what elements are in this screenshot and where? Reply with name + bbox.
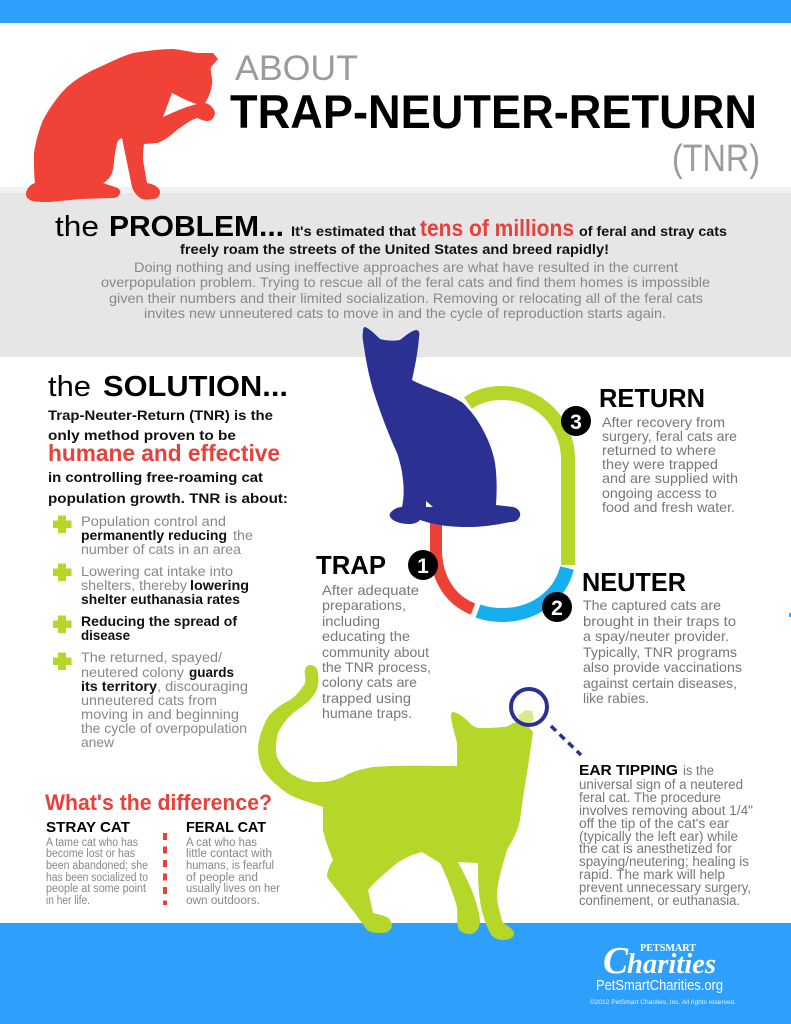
bullet 2: lowering bbox=[190, 577, 249, 593]
feral cat text: own outdoors. bbox=[186, 895, 260, 907]
feral cat text: usually lives on her bbox=[186, 883, 280, 895]
ear tipping text: (typically the left ear) while bbox=[579, 829, 738, 844]
ring segment: neuter bbox=[478, 568, 567, 615]
neuter text: The captured cats are bbox=[583, 597, 721, 613]
trap text: preparations, bbox=[322, 597, 406, 613]
solution intro text: population growth. TNR is about: bbox=[48, 490, 288, 506]
ear tipping text: confinement, or euthanasia. bbox=[579, 893, 740, 908]
trap text: including bbox=[322, 613, 380, 629]
clipped ear tip bbox=[518, 710, 534, 723]
neuter text: also provide vaccinations bbox=[583, 659, 742, 675]
ear tipping text: prevent unnecessary surgery, bbox=[579, 880, 751, 895]
ear tipping text: involves removing about 1/4" bbox=[579, 803, 753, 818]
trap text bbox=[322, 582, 431, 721]
problem lead sentence: of feral and stray cats bbox=[579, 223, 727, 239]
bullet 2: shelter euthanasia rates bbox=[81, 591, 240, 607]
feral cat text: of people and bbox=[186, 872, 258, 884]
heading: return: RETURN bbox=[599, 383, 705, 413]
trap text: community about bbox=[322, 644, 429, 660]
return text: ongoing access to bbox=[602, 485, 717, 501]
stray cat text bbox=[46, 837, 148, 907]
solution intro text: humane and effective bbox=[48, 440, 280, 466]
heading: neuter: NEUTER bbox=[582, 567, 686, 597]
stray cat text: A tame cat who has bbox=[46, 837, 138, 849]
ear tipping lead: EAR TIPPING bbox=[579, 762, 678, 779]
return text: surgery, feral cats are bbox=[602, 428, 737, 444]
title: about: ABOUT bbox=[235, 49, 358, 88]
solution intro text: Trap-Neuter-Return (TNR) is the bbox=[48, 407, 273, 423]
trap text: educating the bbox=[322, 628, 410, 644]
trap text: After adequate bbox=[322, 582, 419, 598]
bullet list bbox=[53, 513, 253, 750]
ear tipping lead: is the bbox=[683, 763, 714, 778]
neuter text bbox=[583, 597, 742, 706]
bullet 1: permanently reducing bbox=[81, 527, 227, 543]
heading: the solution: SOLUTION... bbox=[103, 371, 288, 403]
copyright: ©2012 PetSmart Charities, Inc. All rights reserved. bbox=[590, 998, 736, 1006]
badge 3: 3 bbox=[570, 411, 582, 434]
website: PetSmartCharities.org bbox=[596, 978, 723, 994]
return text: food and fresh water. bbox=[602, 499, 735, 515]
ear tipping text bbox=[579, 777, 753, 908]
icon: red grooming cat bbox=[26, 49, 218, 202]
bullet 1: the bbox=[233, 527, 253, 543]
problem body text: given their numbers and their limited socialization. Removing or relocating all of the feral cats bbox=[109, 290, 703, 306]
small edge mark bbox=[789, 613, 791, 617]
logo small wordmark: PETSMART bbox=[640, 943, 696, 954]
return text: and are supplied with bbox=[602, 470, 738, 486]
stray cat column bbox=[46, 819, 148, 907]
ear tipping marker bbox=[511, 689, 581, 755]
heading: the problem: PROBLEM... bbox=[109, 211, 284, 243]
bullet 4: The returned, spayed/ bbox=[81, 649, 222, 665]
panel: the solution bbox=[48, 371, 288, 750]
feral cat text: A cat who has bbox=[186, 837, 257, 849]
problem lead sentence bbox=[180, 215, 727, 257]
ear tipping text: universal sign of a neutered bbox=[579, 777, 743, 792]
top blue bar bbox=[0, 0, 791, 23]
bullet 3: disease bbox=[81, 627, 130, 643]
bullet 4: unneutered cats from bbox=[81, 692, 217, 708]
bullet 4: , discouraging bbox=[157, 678, 248, 694]
logo: petsmart charities bbox=[590, 940, 736, 1006]
footer band bbox=[0, 923, 791, 1024]
ear tipping text: rapid. The mark will help bbox=[579, 867, 725, 882]
notch in blue cat bbox=[426, 501, 433, 507]
ear tipping text: spaying/neutering; healing is bbox=[579, 854, 749, 869]
logo script initial: C bbox=[603, 940, 629, 982]
bullet 2: Lowering cat intake into bbox=[81, 563, 233, 579]
neuter text: like rabies. bbox=[583, 690, 649, 706]
trap text: humane traps. bbox=[322, 705, 412, 721]
bullet 2 bbox=[53, 563, 249, 607]
solution intro text bbox=[48, 407, 288, 506]
neuter text: brought in their traps to bbox=[583, 613, 736, 629]
icon: green standing cat bbox=[258, 665, 533, 940]
panel: trap bbox=[316, 550, 431, 721]
feral cat column bbox=[186, 819, 280, 907]
feral cat text: little contact with bbox=[186, 848, 272, 860]
heading: trap: TRAP bbox=[316, 550, 386, 580]
stray cat text: has been socialized to bbox=[46, 872, 148, 884]
return text: returned to where bbox=[602, 442, 716, 458]
trap text: the TNR process, bbox=[322, 659, 431, 675]
red dashed divider bbox=[163, 833, 167, 905]
panel: what's the difference bbox=[45, 790, 280, 907]
feral cat text: humans, is fearful bbox=[186, 860, 274, 872]
badge 2 bbox=[542, 592, 572, 622]
badge 3 bbox=[561, 406, 591, 436]
ear tipping text: feral cat. The procedure bbox=[579, 790, 721, 805]
return text: they were trapped bbox=[602, 456, 718, 472]
logo script wordmark: harities bbox=[627, 948, 716, 980]
title: trap-neuter-return: TRAP-NEUTER-RETURN bbox=[230, 85, 757, 138]
badge 1 bbox=[408, 550, 438, 580]
problem body text: overpopulation problem. Trying to rescue all of the feral cats and find them homes is impossible bbox=[101, 274, 710, 290]
title: tnr: (TNR) bbox=[672, 138, 760, 180]
trap text: colony cats are bbox=[322, 674, 417, 690]
neuter text: a spay/neuter provider. bbox=[583, 628, 729, 644]
neuter text: against certain diseases, bbox=[583, 675, 737, 691]
dashed pointer bbox=[551, 726, 581, 755]
bullet 4 bbox=[53, 649, 248, 750]
heading: what's the difference: What's the difference? bbox=[45, 790, 272, 815]
stray cat text: been abandoned; she bbox=[46, 860, 148, 872]
bullet 1: number of cats in an area bbox=[81, 541, 241, 557]
ring segment: trap bbox=[436, 520, 473, 609]
stray cat text: become lost or has bbox=[46, 848, 135, 860]
heading: the problem: the bbox=[55, 211, 99, 243]
ear tipping text: the cat is anesthetized for bbox=[579, 841, 732, 856]
panel: neuter bbox=[582, 567, 742, 706]
bullet 4: the cycle of overpopulation bbox=[81, 720, 247, 736]
bullet 3: Reducing the spread of bbox=[81, 613, 237, 629]
problem body text: invites new unneutered cats to move in and the cycle of reproduction starts again. bbox=[144, 305, 666, 321]
solution intro text: only method proven to be bbox=[48, 427, 236, 443]
heading: the solution: the bbox=[48, 371, 91, 403]
neuter text: Typically, TNR programs bbox=[583, 644, 737, 660]
stray cat text: people at some point bbox=[46, 883, 147, 895]
badge 2: 2 bbox=[551, 597, 563, 620]
stray cat heading: STRAY CAT bbox=[46, 819, 130, 836]
bullet 4: guards bbox=[189, 664, 234, 680]
trap text: trapped using bbox=[322, 690, 411, 706]
bullet 4: its territory bbox=[81, 678, 157, 694]
problem lead sentence: freely roam the streets of the United States and breed rapidly! bbox=[180, 241, 609, 257]
stray cat text: in her life. bbox=[46, 895, 90, 907]
feral cat text bbox=[186, 837, 280, 907]
icon: blue sitting cat bbox=[363, 327, 520, 527]
feral cat heading: FERAL CAT bbox=[186, 819, 266, 836]
problem lead sentence: tens of millions bbox=[420, 215, 574, 241]
bullet 4: anew bbox=[81, 734, 115, 750]
ring segment: return bbox=[468, 393, 568, 565]
return text bbox=[602, 414, 738, 515]
bullet 3 bbox=[53, 613, 237, 643]
solution intro text: in controlling free-roaming cat bbox=[48, 469, 263, 485]
magnifier ring bbox=[511, 689, 547, 725]
bullet 4: neutered colony bbox=[81, 664, 184, 680]
problem body text bbox=[101, 259, 710, 321]
panel: the problem text bbox=[55, 211, 727, 321]
return text: After recovery from bbox=[602, 414, 725, 430]
cycle ring bbox=[436, 393, 568, 615]
bullet 4: moving in and beginning bbox=[81, 706, 239, 722]
problem lead sentence: It's estimated that bbox=[291, 223, 416, 239]
ear tipping text: off the tip of the cat's ear bbox=[579, 816, 730, 831]
bullet 1: Population control and bbox=[81, 513, 226, 529]
badge 1: 1 bbox=[417, 555, 429, 578]
panel: ear tipping bbox=[579, 762, 753, 908]
panel: problem background bbox=[0, 187, 791, 357]
title bbox=[230, 49, 760, 180]
panel: return bbox=[599, 383, 738, 515]
bullet 1 bbox=[53, 513, 253, 557]
problem body text: Doing nothing and using ineffective approaches are what have resulted in the current bbox=[134, 259, 678, 275]
bullet 2: shelters, thereby bbox=[81, 577, 187, 593]
